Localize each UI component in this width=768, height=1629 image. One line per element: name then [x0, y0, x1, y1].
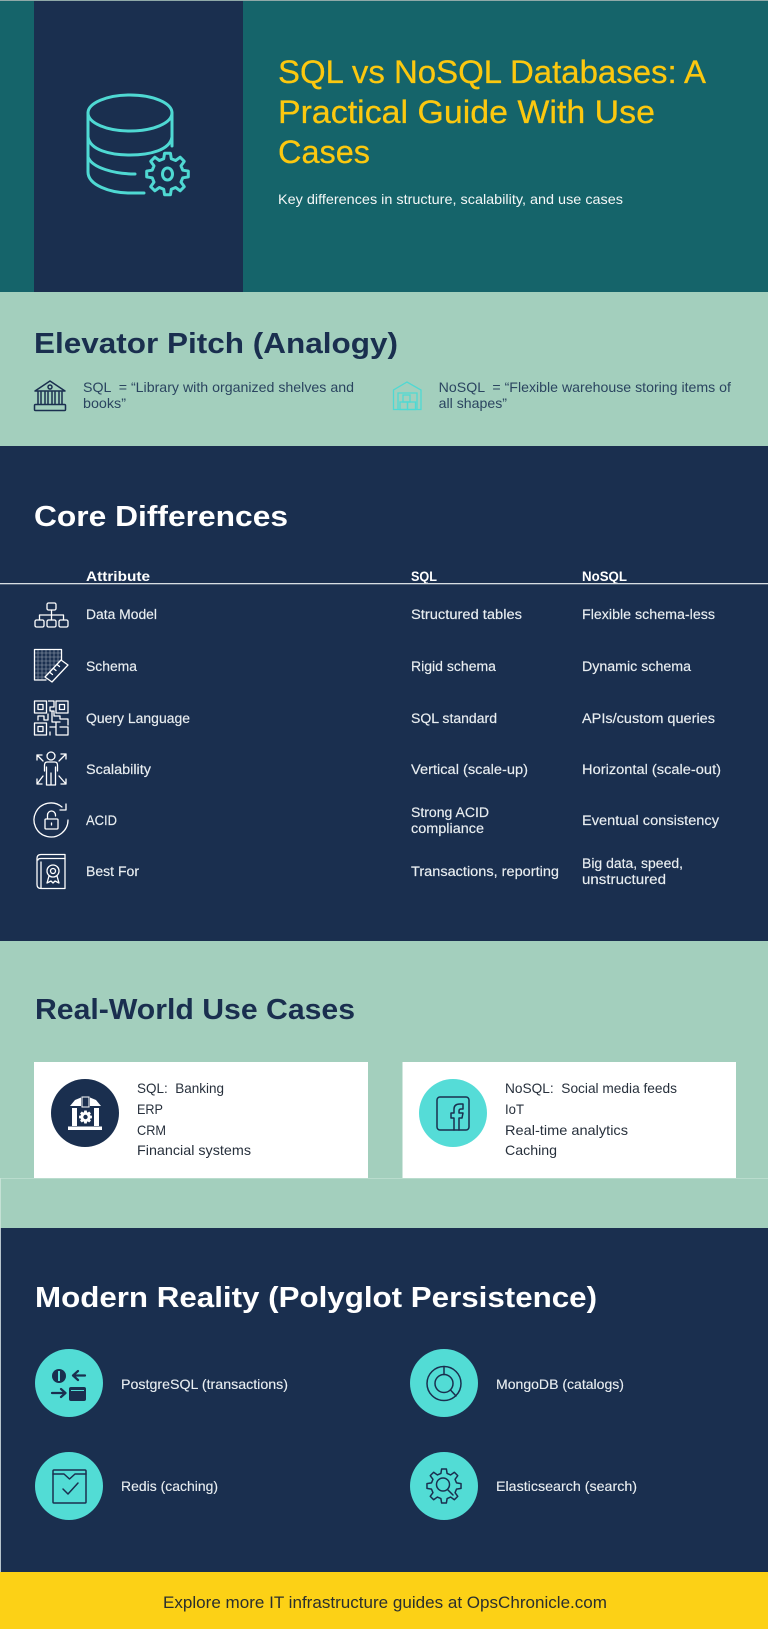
row: scalability: Scalability: [86, 762, 151, 777]
text: NoSQL use case list: IoT: [505, 1101, 524, 1117]
text: SQL use case list: CRM: [137, 1122, 166, 1138]
text: SQL use case list: SQL: Banking: [137, 1080, 224, 1096]
row: scalability: Horizontal (scale-out): [582, 762, 721, 777]
item: MongoDB: [410, 1349, 624, 1417]
heading: core differences: Core Differences: [34, 501, 288, 533]
item: PostgreSQL: PostgreSQL (transactions): [121, 1376, 288, 1392]
row: best for: Transactions, reporting: [411, 864, 559, 879]
text: SQL use case list: [137, 1080, 251, 1158]
text: NoSQL analogy: [439, 379, 731, 411]
icon: hierarchy: [35, 603, 68, 627]
title: Practical Guide With Use: [278, 94, 655, 130]
text: NoSQL use case list: NoSQL: Social media feeds: [505, 1080, 677, 1096]
heading: elevator pitch: Elevator Pitch (Analogy): [34, 328, 398, 360]
subtitle: Key differences in structure, scalability, and use cases: [278, 191, 623, 207]
item: Redis: Redis (caching): [121, 1478, 218, 1494]
text: NoSQL use case list: Caching: [505, 1142, 557, 1158]
table header: SQL: [411, 569, 437, 584]
icon: grid paper and ruler: [34, 650, 68, 682]
card: NoSQL use cases: [402, 1062, 736, 1178]
row: schema: Rigid schema: [411, 659, 496, 674]
text: NoSQL use case list: Real-time analytics: [505, 1122, 628, 1138]
row: query language: [34, 701, 715, 735]
text: SQL analogy: SQL = “Library with organized shelves and: [83, 379, 354, 395]
row: data model: Structured tables: [411, 607, 522, 622]
item: Redis: [35, 1452, 218, 1520]
text: NoSQL use case list: [505, 1080, 677, 1158]
icon: person with arrows: [37, 752, 66, 785]
row: scalability: Vertical (scale-up): [411, 762, 528, 777]
icon: circular arrow with lock: [34, 803, 68, 837]
text: footer: Explore more IT infrastructure guides at OpsChronicle.com: [163, 1593, 607, 1612]
row: ACID: ACID: [86, 813, 117, 828]
panel: modern reality: [0, 1228, 768, 1572]
panel: header: [0, 0, 768, 292]
icon: gear with magnifier: [410, 1452, 478, 1520]
text: SQL analogy: books”: [83, 395, 126, 411]
heading: modern reality: Modern Reality (Polyglot Persistence): [35, 1282, 597, 1314]
heading: real-world use cases: Real-World Use Cases: [35, 994, 355, 1026]
table header: [0, 569, 768, 584]
row: query language: APIs/custom queries: [582, 711, 715, 726]
text: NoSQL analogy: all shapes”: [439, 395, 507, 411]
title: SQL vs NoSQL Databases: A: [278, 54, 707, 90]
row: query language: SQL standard: [411, 711, 497, 726]
panel: elevator pitch: [0, 292, 768, 446]
icon: QR code: [34, 701, 68, 735]
row: schema: Schema: [86, 659, 137, 674]
row: data model: [35, 603, 715, 627]
icon: data exchange: [35, 1349, 103, 1417]
icon: donut chart: [410, 1349, 478, 1417]
table header: NoSQL: [582, 569, 627, 584]
text: SQL analogy: [83, 379, 354, 411]
row: query language: Query Language: [86, 711, 190, 726]
text: SQL use case list: ERP: [137, 1101, 163, 1117]
icon: pocket with check: [35, 1452, 103, 1520]
title: Cases: [278, 134, 370, 170]
icon: bank with gear: [51, 1079, 119, 1147]
item: Elasticsearch: Elasticsearch (search): [496, 1478, 637, 1494]
row: scalability: [37, 752, 721, 785]
title: [278, 54, 707, 170]
table header: Attribute: [86, 569, 151, 584]
row: ACID: Eventual consistency: [582, 813, 719, 828]
panel: core differences: [0, 446, 768, 941]
row: schema: Dynamic schema: [582, 659, 692, 674]
row: data model: Data Model: [86, 607, 157, 622]
row: best for: Big data, speed,: [582, 856, 683, 871]
item: PostgreSQL: [35, 1349, 288, 1417]
row: best for: [37, 854, 683, 888]
panel: real-world use cases: [0, 941, 768, 1228]
panel: footer call to action: [0, 1572, 768, 1629]
row: schema: [34, 650, 692, 682]
row: best for: Best For: [86, 864, 140, 879]
row: data model: Flexible schema-less: [582, 607, 715, 622]
text: SQL use case list: Financial systems: [137, 1142, 251, 1158]
card: SQL use cases: [34, 1062, 368, 1178]
icon: facebook logo: [419, 1079, 487, 1147]
item: Elasticsearch: [410, 1452, 637, 1520]
icon: database with gear: [88, 95, 188, 195]
item: MongoDB: MongoDB (catalogs): [496, 1376, 624, 1392]
row: ACID: Strong ACID: [411, 805, 489, 820]
icon: book with badge: [37, 854, 65, 888]
row: best for: unstructured: [582, 872, 666, 887]
row: ACID: compliance: [411, 821, 484, 836]
text: NoSQL analogy: NoSQL = “Flexible warehouse storing items of: [439, 379, 731, 395]
icon: warehouse: [394, 382, 421, 410]
row: ACID: [34, 803, 719, 837]
icon: library building: [34, 381, 66, 410]
